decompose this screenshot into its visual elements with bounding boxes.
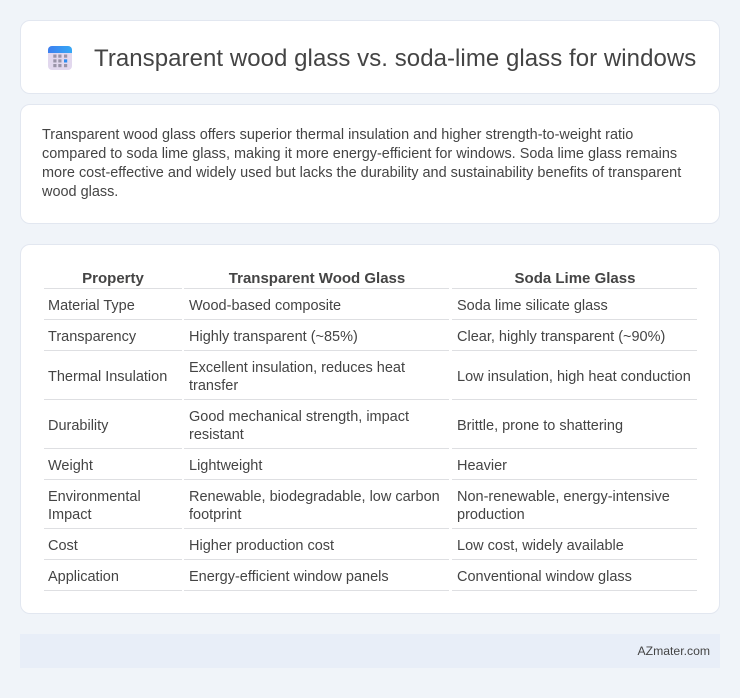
row: Weight — [48, 458, 507, 474]
row: Weight: Weight — [48, 458, 93, 474]
row: Material Type: Wood-based composite — [189, 298, 341, 314]
row: Environmental Impact: footprint — [189, 507, 241, 523]
row: Transparency: Transparency — [48, 329, 136, 345]
row: Durability: Good mechanical strength, impact — [189, 409, 409, 425]
row: Material Type: Material Type — [48, 298, 135, 314]
row: Environmental Impact: production — [457, 507, 525, 523]
row: Material Type — [48, 298, 608, 314]
row: Environmental Impact: Environmental — [48, 489, 141, 505]
comparison table — [44, 270, 697, 591]
row: Durability: resistant — [189, 427, 244, 443]
row: Durability: Durability — [48, 418, 108, 434]
row: Cost: Cost — [48, 538, 78, 554]
row: Durability: Brittle, prone to shattering — [457, 418, 623, 434]
summary text: wood glass. — [42, 184, 118, 200]
row: Weight: Heavier — [457, 458, 507, 474]
row: Environmental Impact: Impact — [48, 507, 92, 523]
summary text: Transparent wood glass offers superior thermal insulation and higher strength-to-weight ratio — [42, 127, 633, 143]
row: Application: Conventional window glass — [457, 569, 632, 585]
row: Cost: Higher production cost — [189, 538, 334, 554]
row: Application: Application — [48, 569, 119, 585]
footer bar — [20, 634, 720, 668]
row: Thermal Insulation: Low insulation, high heat conduction — [457, 369, 691, 385]
panel: comparison table — [20, 244, 720, 614]
row: Durability — [48, 409, 623, 443]
panel: title header — [20, 20, 720, 94]
row: Environmental Impact: Renewable, biodegradable, low carbon — [189, 489, 440, 505]
summary text: compared to soda lime glass, making it more energy-efficient for windows. Soda lime glass remains — [42, 146, 677, 162]
row: Thermal Insulation — [48, 360, 691, 394]
title: Transparent wood glass vs. soda-lime glass for windows — [94, 45, 696, 72]
row: Application: Energy-efficient window panels — [189, 569, 389, 585]
row: Material Type: Soda lime silicate glass — [457, 298, 608, 314]
table header — [82, 270, 635, 287]
summary text — [42, 127, 682, 200]
row: Thermal Insulation: Excellent insulation, reduces heat — [189, 360, 405, 376]
panel: summary — [20, 104, 720, 224]
row: Thermal Insulation: transfer — [189, 378, 238, 394]
row: Weight: Lightweight — [189, 458, 262, 474]
row: Transparency — [48, 329, 665, 345]
table header: Transparent Wood Glass — [229, 270, 405, 287]
footer credit: AZmater.com — [638, 644, 710, 658]
row: Transparency: Clear, highly transparent (~90%) — [457, 329, 665, 345]
row: Environmental Impact: Non-renewable, energy-intensive — [457, 489, 670, 505]
table header: Soda Lime Glass — [515, 270, 635, 287]
row: Application — [48, 569, 632, 585]
table header: Property — [82, 270, 144, 287]
icon: calendar — [48, 46, 72, 70]
row: Cost: Low cost, widely available — [457, 538, 624, 554]
row: Cost — [48, 538, 624, 554]
summary text: more cost-effective and widely used but lacks the durability and sustainability benefits of transparent — [42, 165, 681, 181]
row: Environmental Impact — [48, 489, 670, 523]
row: Thermal Insulation: Thermal Insulation — [48, 369, 167, 385]
row: Transparency: Highly transparent (~85%) — [189, 329, 358, 345]
